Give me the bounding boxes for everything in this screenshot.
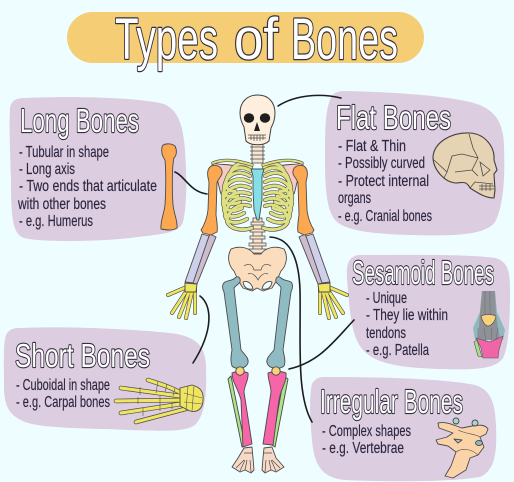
connector: long bones (175, 172, 207, 194)
text: long bones facts: with other bones (17, 196, 106, 213)
scapula left (212, 163, 236, 196)
heading: long bones: Long Bones (20, 102, 139, 139)
icon: side skull (433, 133, 497, 198)
text: sesamoid facts: tendons (366, 325, 406, 342)
panel: sesamoid bones (347, 254, 510, 369)
pelvis (229, 247, 286, 291)
scapula right (279, 163, 303, 196)
panel: flat bones (325, 91, 504, 235)
text: irregular facts: - e.g. Vertebrae (322, 440, 404, 457)
skeleton (168, 95, 347, 473)
icon: hand (116, 380, 203, 422)
title: Bones (291, 7, 398, 72)
title: of (234, 7, 279, 72)
sternum (251, 169, 264, 220)
femur left (223, 277, 248, 368)
text: flat bones facts: organs (338, 190, 371, 207)
panel: short bones (4, 327, 206, 431)
panel: irregular bones (310, 377, 496, 481)
text: flat bones facts: - e.g. Cranial bones (338, 208, 432, 225)
text: irregular facts (322, 423, 411, 457)
tibia right (263, 372, 286, 445)
arm right (293, 165, 347, 318)
text: long bones facts: - Long axis (19, 161, 75, 178)
connector: short bones (193, 296, 209, 363)
skull (240, 95, 275, 145)
arm left (168, 165, 222, 318)
icon: patella knee (473, 291, 505, 358)
text: sesamoid facts (366, 290, 448, 359)
clavicles (213, 160, 302, 165)
text: long bones facts: - e.g. Humerus (19, 213, 93, 230)
text: sesamoid facts: - e.g. Patella (366, 342, 429, 359)
patella right (272, 367, 280, 375)
tibia left (232, 372, 252, 447)
patella left (236, 367, 244, 375)
text: short facts (16, 377, 110, 411)
foot left (232, 447, 254, 473)
femur right (267, 277, 292, 368)
toe lines (236, 453, 280, 472)
fibula right (272, 376, 288, 447)
panel: long bones (10, 97, 186, 241)
text: long bones facts: - Tubular in shape (19, 144, 109, 161)
text: short facts: - e.g. Carpal bones (16, 394, 110, 411)
connector: sesamoid bones (289, 320, 354, 369)
text: flat bones facts: - Protect internal (338, 173, 429, 190)
heading: flat bones: Flat Bones (336, 99, 451, 136)
text: sesamoid facts: - They lie within (366, 307, 448, 324)
text: short facts: - Cuboidal in shape (16, 377, 110, 394)
spine (249, 143, 266, 254)
text: flat bones facts: - Flat & Thin (338, 138, 406, 155)
text: flat bones facts: - Possibly curved (338, 155, 425, 172)
text: long bones facts: - Two ends that articulate (19, 178, 157, 195)
pelvis detail (244, 264, 271, 280)
foot right (262, 447, 284, 473)
heading: short bones: Short Bones (15, 337, 150, 374)
text: sesamoid facts: - Unique (366, 290, 407, 307)
text: long bones facts (17, 144, 157, 230)
icon: vertebra (436, 418, 488, 478)
text: irregular facts: - Complex shapes (322, 423, 411, 440)
icon: humerus (161, 144, 177, 230)
connector: flat bones (278, 95, 341, 106)
title banner (67, 7, 424, 72)
title: Types (115, 7, 218, 72)
ribcage (223, 164, 292, 230)
connector: irregular bones (270, 237, 312, 422)
fibula left (228, 376, 245, 447)
text: flat bones facts (338, 138, 432, 225)
